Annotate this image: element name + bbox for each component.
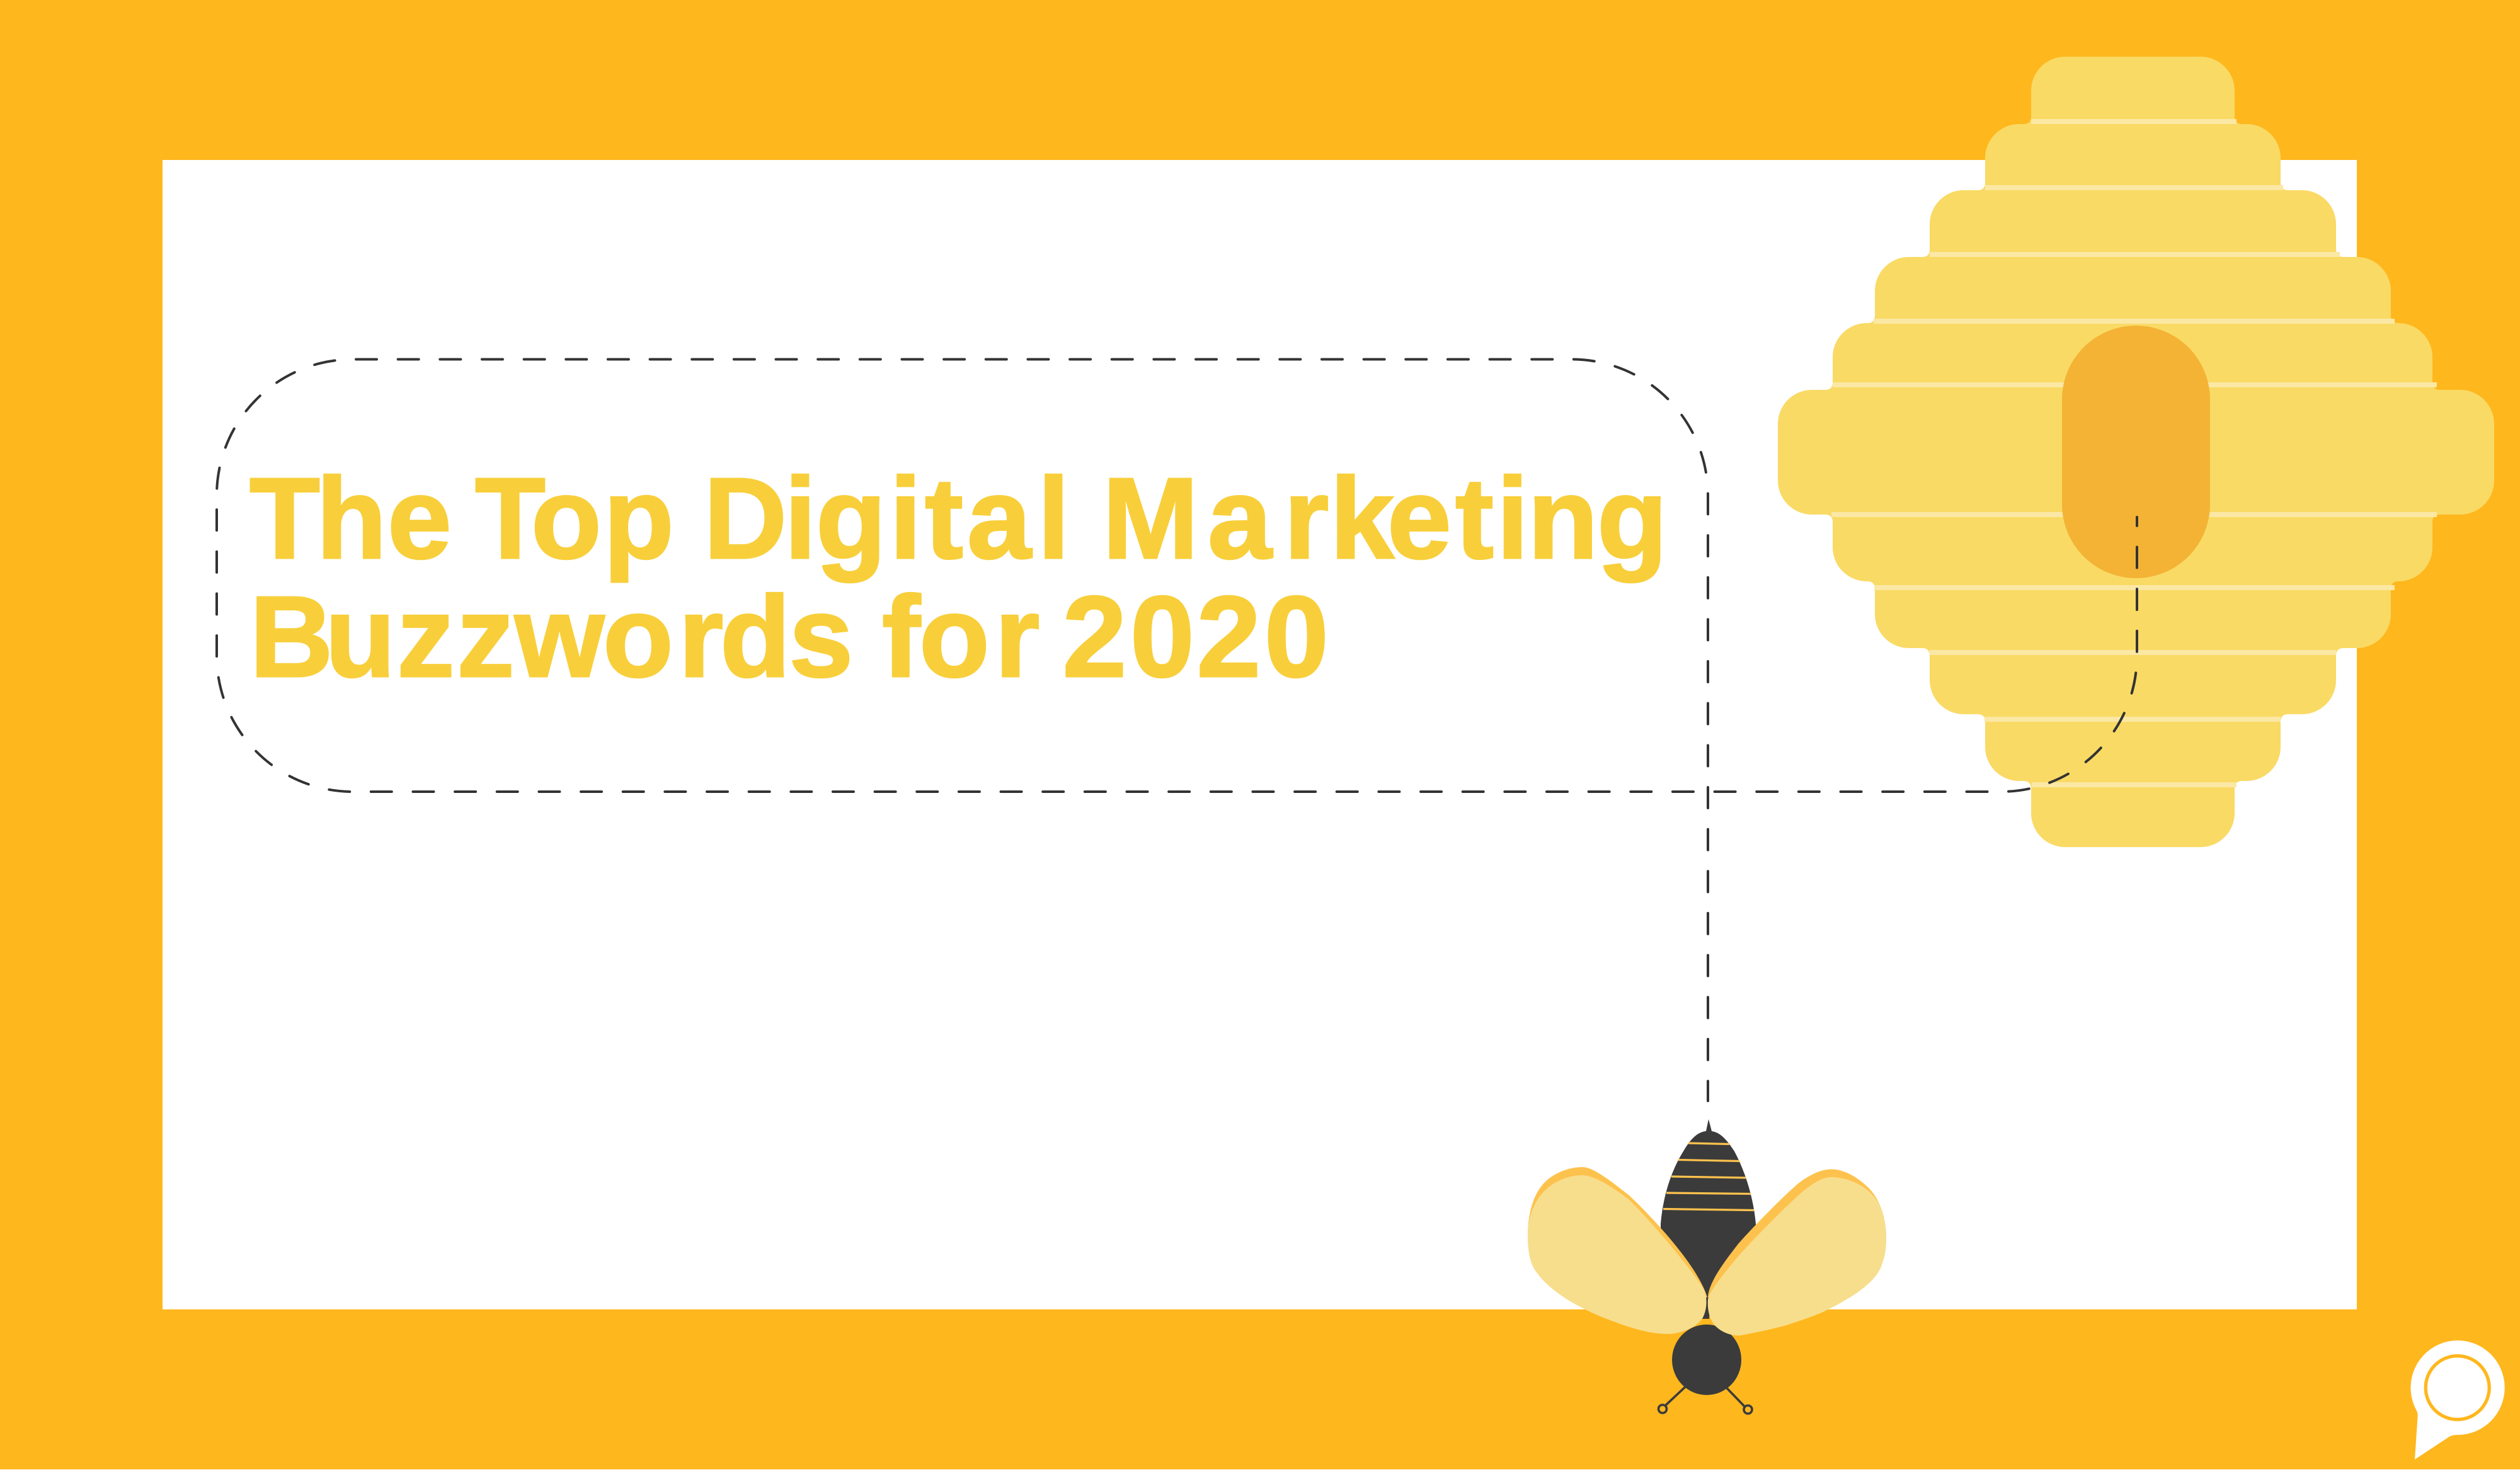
bee stripes xyxy=(1663,1143,1754,1211)
dashed flight path xyxy=(217,359,2137,1101)
title xyxy=(249,453,1668,701)
bee body xyxy=(1661,1119,1756,1319)
icon: beehive xyxy=(1778,57,2494,847)
hive entrance xyxy=(2062,326,2210,578)
title: Buzzwords for 2020 xyxy=(249,572,1329,701)
right wing xyxy=(1708,1169,1886,1336)
icon: bee xyxy=(1528,1119,1886,1413)
title: The Top Digital Marketing xyxy=(249,453,1668,583)
icon: speech bubble logo xyxy=(2410,1340,2505,1459)
bee antennae xyxy=(1658,1387,1752,1413)
bee head xyxy=(1672,1325,1741,1395)
white central panel xyxy=(163,160,2357,1309)
left wing xyxy=(1528,1167,1707,1334)
